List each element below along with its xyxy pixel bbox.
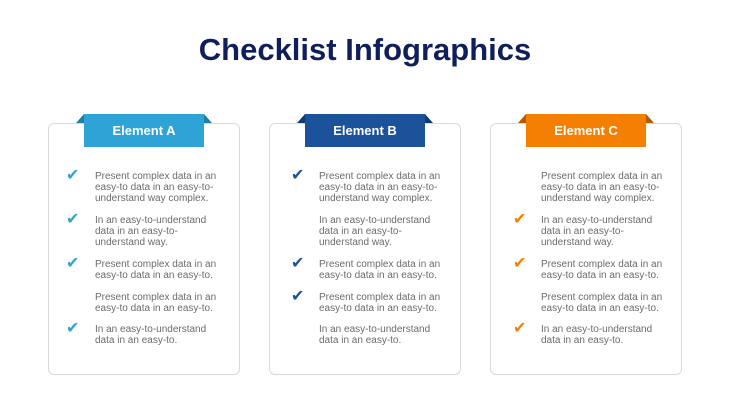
card border A	[48, 123, 240, 375]
checklist B: Present complex data in an easy-to data in an easy-to.	[319, 259, 440, 281]
card border C	[490, 123, 682, 375]
checklist B: In an easy-to-understand data in an easy-to-understand way.	[319, 215, 430, 248]
header ribbon A: Element A	[112, 123, 176, 138]
checklist C: ✔	[513, 255, 526, 272]
checklist B: ✔	[291, 288, 304, 305]
checklist A: ✔	[66, 211, 79, 228]
checklist C: Present complex data in an easy-to data in an easy-to.	[541, 259, 662, 281]
checklist C: In an easy-to-understand data in an easy-to.	[541, 324, 652, 346]
header ribbon B	[297, 114, 433, 147]
checklist A: Present complex data in an easy-to data in an easy-to.	[95, 292, 216, 314]
checklist C: Present complex data in an easy-to data in an easy-to-understand way complex.	[541, 171, 662, 204]
checklist B: Present complex data in an easy-to data in an easy-to.	[319, 292, 440, 314]
checklist B: ✔	[291, 255, 304, 272]
panel: Element B	[269, 114, 461, 375]
checklist C: ✔	[513, 211, 526, 228]
checklist A: In an easy-to-understand data in an easy-to.	[95, 324, 206, 346]
card border B	[269, 123, 461, 375]
checklist A: ✔	[66, 167, 79, 184]
panel: Element A	[48, 114, 240, 375]
checklist C: ✔	[513, 320, 526, 337]
checklist B: Present complex data in an easy-to data in an easy-to-understand way complex.	[319, 171, 440, 204]
panel: Element C	[490, 114, 682, 375]
header ribbon C: Element C	[554, 123, 618, 138]
checklist B	[291, 167, 440, 346]
checklist C: Present complex data in an easy-to data in an easy-to.	[541, 292, 662, 314]
header ribbon A	[76, 114, 212, 147]
header ribbon C	[518, 114, 654, 147]
checklist A: Present complex data in an easy-to data in an easy-to-understand way complex.	[95, 171, 216, 204]
checklist B: In an easy-to-understand data in an easy-to.	[319, 324, 430, 346]
checklist A: In an easy-to-understand data in an easy-to-understand way.	[95, 215, 206, 248]
checklist A: ✔	[66, 320, 79, 337]
checklist A	[66, 167, 216, 346]
checklist A: Present complex data in an easy-to data in an easy-to.	[95, 259, 216, 281]
header ribbon B: Element B	[333, 123, 397, 138]
title: Checklist Infographics	[199, 32, 531, 67]
checklist B: ✔	[291, 167, 304, 184]
checklist C	[513, 171, 662, 346]
checklist C: In an easy-to-understand data in an easy-to-understand way.	[541, 215, 652, 248]
checklist A: ✔	[66, 255, 79, 272]
